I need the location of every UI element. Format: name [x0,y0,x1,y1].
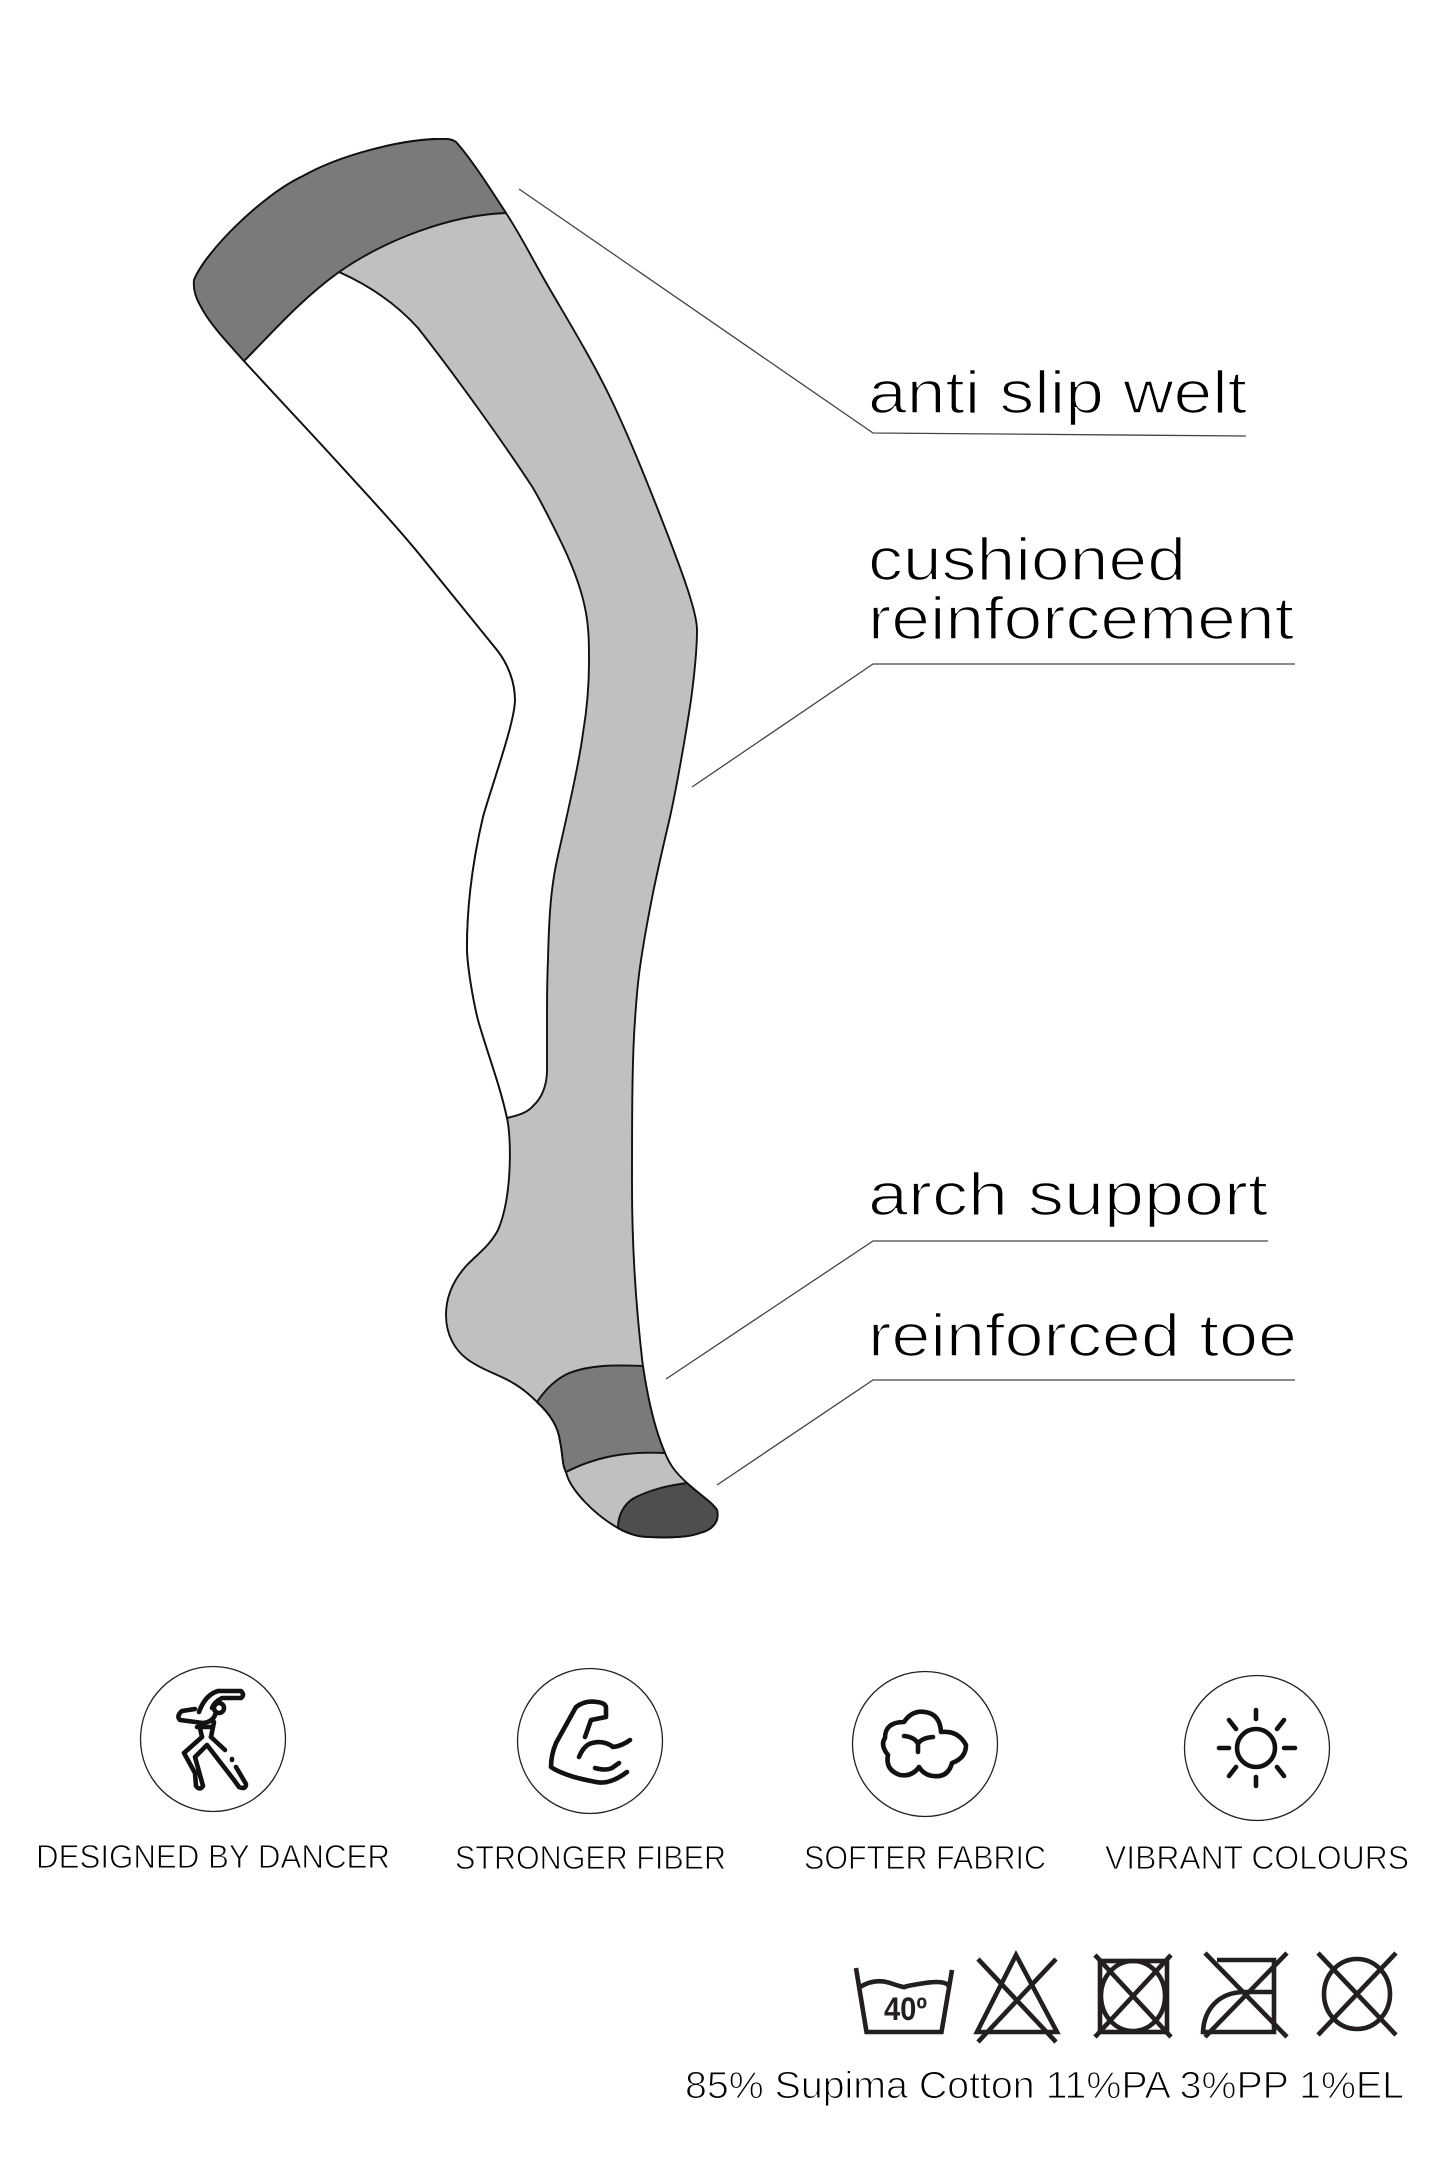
unreinforced white panel [244,272,589,1118]
callout: arch support: arch support [868,1161,1268,1228]
reinforced toe cap [618,1483,718,1537]
icon: flexed arm [551,1702,630,1783]
callout: cushioned reinforcement: cushioned [868,526,1186,593]
feature: vibrant colours [1105,1676,1409,1876]
feature: softer fabric: SOFTER FABRIC [804,1839,1046,1876]
feature: stronger fiber [455,1668,726,1876]
feature: designed by dancer: DESIGNED BY DANCER [36,1838,390,1875]
callout: cushioned reinforcement: reinforcement [868,585,1294,652]
icon: dancer [178,1691,246,1788]
icon: do not tumble dry [1095,1955,1171,2037]
callout: cushioned reinforcement [692,526,1295,787]
callout: arch support [666,1161,1268,1379]
feature: designed by dancer [36,1666,390,1875]
sock illustration [194,139,718,1537]
feature: softer fabric [804,1672,1046,1876]
icon: wash at 40 degrees [856,1968,952,2032]
icon: do not dry clean [1318,1953,1396,2035]
composition text: 85% Supima Cotton 11%PA 3%PP 1%EL [685,2065,1404,2107]
sock body: cushioned reinforcement [194,139,718,1537]
feature: vibrant colours: VIBRANT COLOURS [1105,1839,1409,1876]
icon: do not iron [1203,1953,1287,2037]
callout: anti slip welt: anti slip welt [868,359,1247,426]
care symbols [856,1953,1396,2042]
icon: wash at 40 degrees: 40º [884,1991,927,2027]
callout: anti slip welt [519,189,1247,436]
icon: do not bleach [977,1955,1057,2042]
arch support band [537,1365,665,1472]
callout: reinforced toe: reinforced toe [868,1302,1297,1369]
anti slip welt band [194,139,506,361]
icon: cotton boll [883,1712,966,1776]
callout: reinforced toe [717,1302,1297,1485]
icon: sun [1219,1710,1295,1786]
feature: stronger fiber: STRONGER FIBER [455,1839,726,1876]
